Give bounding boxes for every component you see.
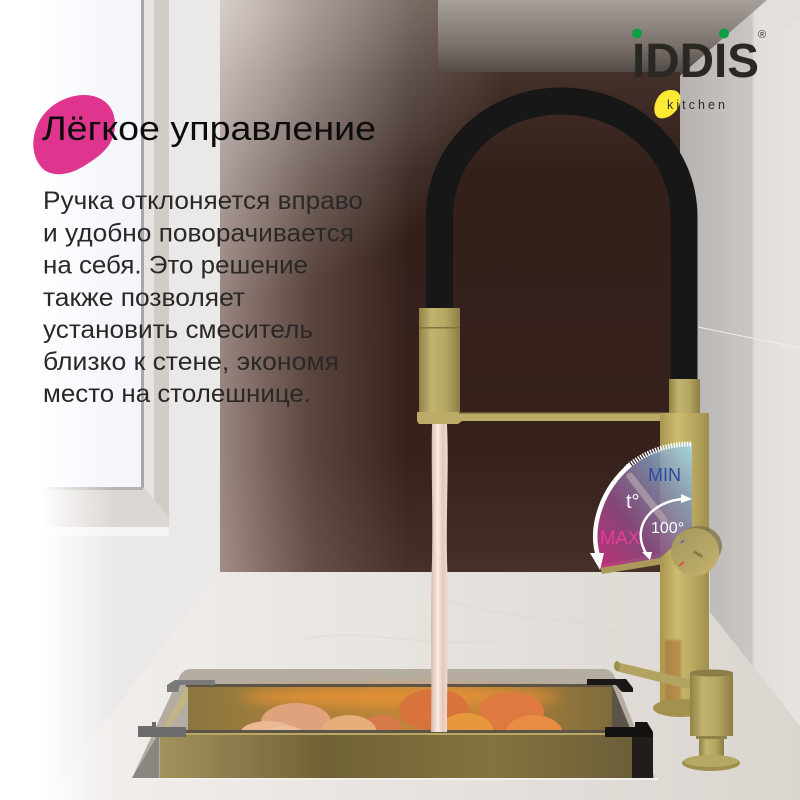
faucet (417, 101, 709, 717)
label: 100°: 100° (651, 520, 684, 537)
background: left fade of wall (220, 0, 410, 572)
large white arrow (590, 465, 630, 570)
background: right wall panel (680, 0, 800, 730)
label: t°: t° (626, 491, 640, 513)
horizontal arm (417, 412, 670, 424)
tick scale arc (626, 444, 691, 468)
logo wordmark: IDDIS (632, 35, 759, 88)
background: top-left wall highlight (220, 0, 520, 300)
oranges in tray (242, 689, 562, 730)
body text (43, 187, 363, 408)
handle low position (600, 554, 664, 574)
spray head sleeve (419, 308, 460, 413)
logo dot (632, 28, 642, 38)
heading accent blob (33, 95, 115, 174)
label: MIN: MIN (648, 465, 681, 485)
registered mark: ® (758, 29, 766, 41)
background: brown wall (220, 0, 690, 572)
body text: Ручка отклоняется вправо (43, 187, 363, 215)
orange reflection glow (240, 688, 560, 706)
background: window with frame and sill (0, 0, 169, 536)
faucet base (653, 699, 707, 717)
ghost handle (630, 476, 664, 520)
label: MAX: MAX (600, 527, 640, 548)
body collar (669, 379, 700, 415)
tray clips (138, 679, 653, 737)
body text: близко к стене, экономя (43, 348, 339, 376)
temperature and rotation diagram (590, 443, 722, 576)
sink tray (160, 684, 632, 778)
water stream (431, 424, 448, 732)
body text: также позволяет (43, 284, 246, 312)
background: left white fade (0, 0, 115, 800)
faucet body (660, 413, 709, 706)
title: Лёгкое управление (42, 110, 376, 148)
soap dispenser (614, 661, 740, 771)
body text: установить смеситель (43, 316, 313, 344)
kitchen label: kitchen (667, 98, 725, 112)
control knob: iddis (692, 550, 704, 560)
background: upper cabinet underside (438, 0, 767, 76)
body text: место на столешнице. (43, 380, 311, 408)
black hose (440, 101, 684, 381)
sink recess (132, 669, 658, 780)
logo second dot (719, 28, 729, 38)
inner white arrow (641, 494, 692, 560)
body text: на себя. Это решение (43, 252, 308, 280)
brand logo (632, 28, 766, 118)
body text: и удобно поворачивается (43, 220, 354, 248)
gradient sector (597, 443, 692, 568)
background: countertop (45, 572, 800, 800)
yellow blob (654, 90, 681, 118)
